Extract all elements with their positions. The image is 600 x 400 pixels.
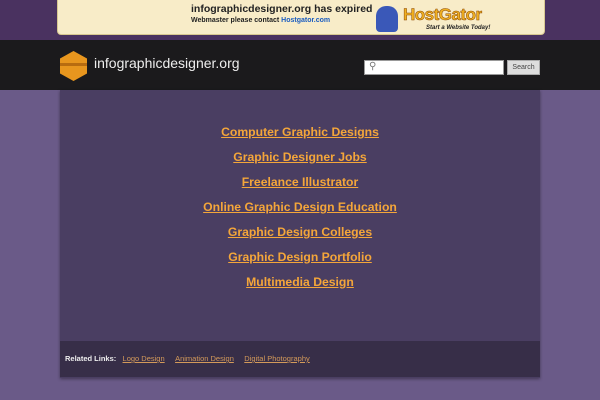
logo icon — [60, 51, 87, 81]
banner text: Webmaster please contact Hostgator.com — [191, 17, 330, 24]
search button: Search — [512, 64, 535, 71]
links list — [203, 125, 397, 289]
links list: Graphic Design Colleges — [228, 225, 372, 239]
banner text — [191, 3, 372, 24]
top purple strip — [0, 0, 600, 40]
footer related links: Related Links: Logo Design Animation Design Digital Photography — [65, 354, 310, 363]
icon: hostgator: HostGator — [403, 5, 482, 24]
search box — [364, 60, 504, 75]
expired banner — [57, 0, 545, 35]
banner text: infographicdesigner.org has expired — [191, 3, 372, 15]
links list: Freelance Illustrator — [242, 175, 358, 189]
icon: hostgator — [376, 5, 490, 32]
links list: Computer Graphic Designs — [221, 125, 379, 139]
links list: Graphic Design Portfolio — [228, 250, 372, 264]
content panel — [60, 90, 540, 378]
links list: Graphic Designer Jobs — [233, 150, 367, 164]
icon: hostgator: Start a Website Today! — [426, 25, 490, 31]
footer related links — [60, 341, 540, 377]
search button — [507, 60, 540, 75]
logo text: infographicdesigner.org — [94, 55, 240, 71]
links list: Multimedia Design — [246, 275, 354, 289]
search box: ⚲ — [369, 61, 376, 72]
header — [0, 40, 600, 90]
links list: Online Graphic Design Education — [203, 200, 397, 214]
